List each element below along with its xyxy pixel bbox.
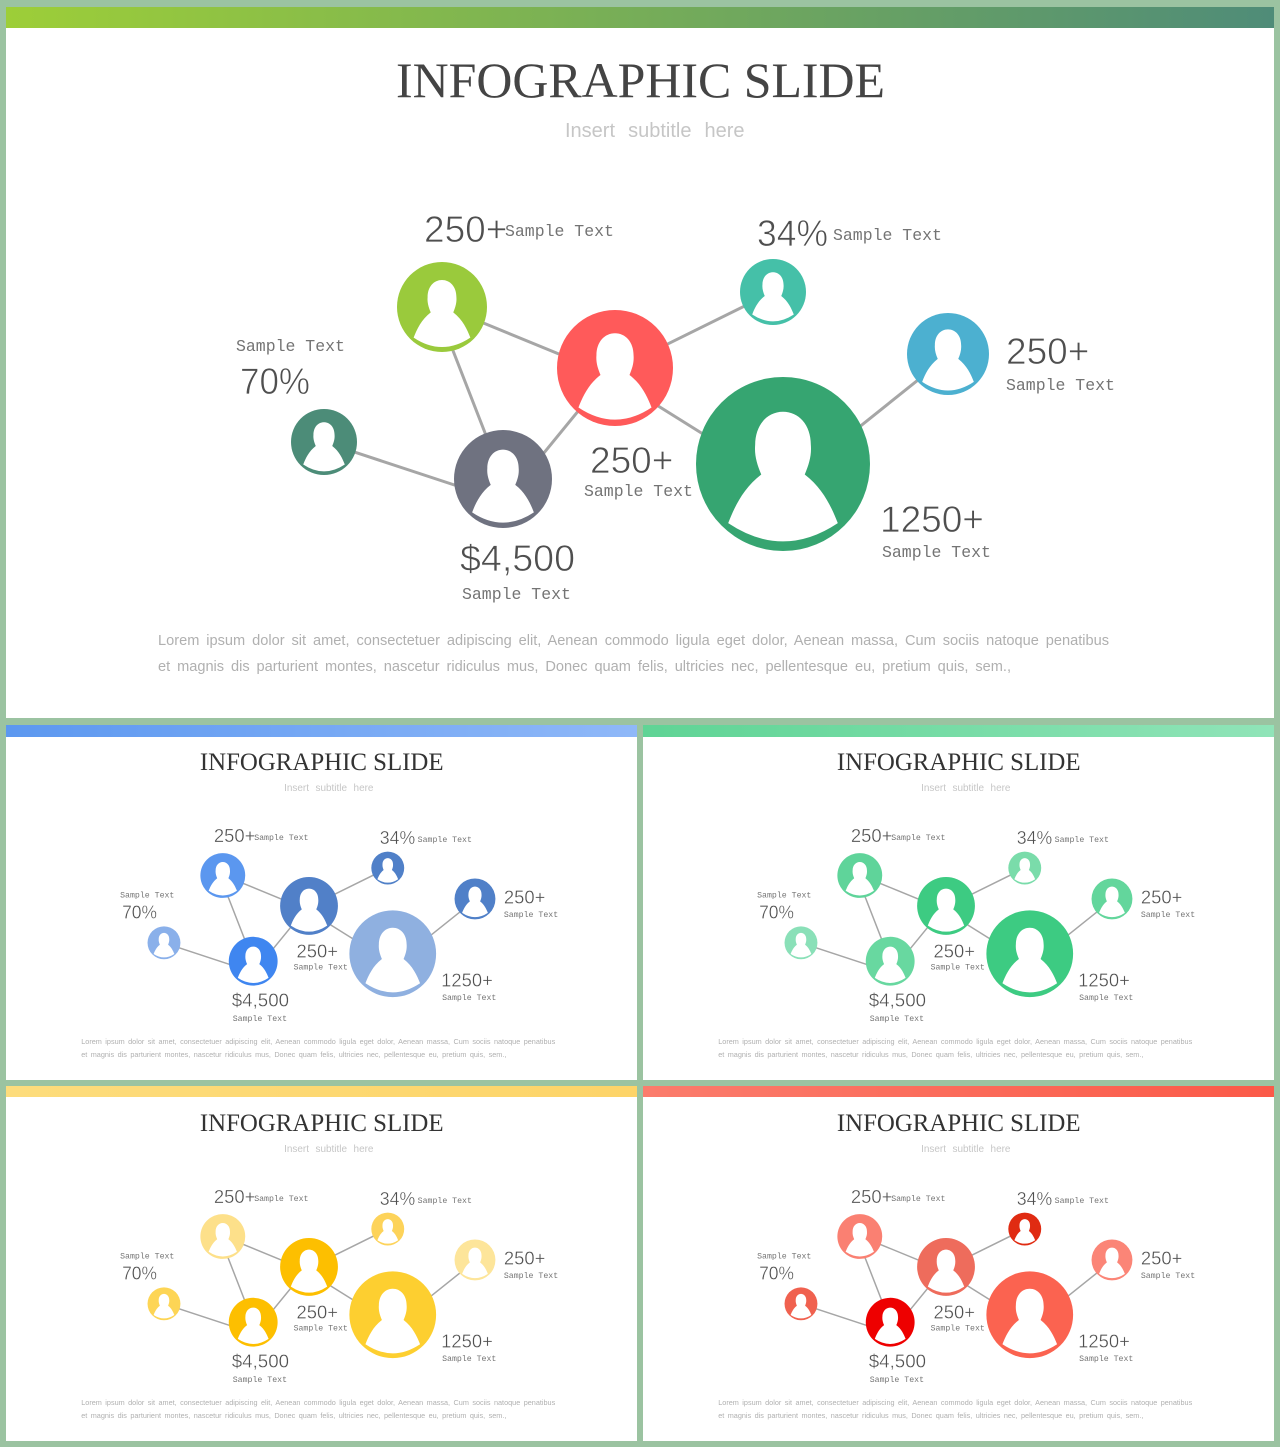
node: person [200, 853, 245, 898]
stat: 250+ center [931, 941, 985, 973]
stat: 250+ center: 250+ [590, 440, 673, 481]
stat: 1250+: 1250+ [880, 499, 984, 540]
node: large person [349, 910, 436, 997]
red slide content [718, 1110, 1195, 1420]
network connecting lines [164, 1229, 475, 1334]
stat: 34%: Sample Text [418, 835, 472, 845]
stat: 70%: Sample Text [120, 890, 174, 900]
body text: et magnis dis parturient montes, nascetur ridiculus mus, Donec quam felis, ultricies nec, pellentesque eu, pretium quis, sem., [718, 1050, 1143, 1059]
stat: 1250+ [441, 1331, 496, 1364]
stat: 1250+ [880, 499, 991, 562]
node: person [455, 878, 495, 919]
node: person [1008, 852, 1041, 884]
stat: 1250+: 1250+ [1078, 1331, 1130, 1352]
stat: 70%: Sample Text [757, 1251, 811, 1261]
stat: 1250+: Sample Text [882, 543, 991, 562]
stat: 34% [1017, 1188, 1109, 1209]
stat: 70% [120, 890, 174, 922]
stat: 250+ upper left: 250+ [851, 825, 892, 846]
node: person [148, 926, 180, 959]
title: INFOGRAPHIC SLIDE [200, 749, 444, 776]
body text [718, 1037, 1193, 1059]
stat: 250+ right: Sample Text [504, 910, 558, 920]
body text: Lorem ipsum dolor sit amet, consectetuer adipiscing elit, Aenean commodo ligula eget dolor, Aenean massa, Cum sociis natoque penatibus [718, 1037, 1193, 1046]
node: lime person [397, 262, 487, 352]
title: INFOGRAPHIC SLIDE [396, 52, 885, 108]
stat: $4,500 [869, 1351, 926, 1385]
stat: 250+ right: Sample Text [1141, 1271, 1195, 1281]
stat: 250+ center: 250+ [934, 941, 975, 962]
blue top bar [6, 725, 637, 737]
stat: 34%: Sample Text [1055, 1196, 1109, 1206]
stat: $4,500 [460, 538, 575, 604]
stat: $4,500 [232, 1351, 289, 1385]
stat: 250+ upper left: Sample Text [891, 1194, 946, 1204]
stat: 34%: 34% [1017, 827, 1052, 848]
stat: 34%: 34% [380, 827, 415, 848]
stat: $4,500: $4,500 [460, 538, 575, 579]
stat: 250+ center: Sample Text [931, 963, 985, 973]
stat: 250+ center: 250+ [297, 941, 338, 962]
panel: main slide [6, 7, 1274, 718]
network connecting lines [164, 868, 475, 973]
node: teal person [740, 259, 806, 325]
node: person [371, 852, 404, 884]
node: person [785, 1287, 817, 1320]
stat: 34%: 34% [1017, 1188, 1052, 1209]
body text: et magnis dis parturient montes, nascetur ridiculus mus, Donec quam felis, ultricies nec, pellentesque eu, pretium quis, sem., [81, 1050, 506, 1059]
stat: 34% [757, 213, 942, 254]
node: grey person [454, 430, 552, 528]
stat: 250+ center [294, 1302, 348, 1334]
title: INFOGRAPHIC SLIDE [837, 1110, 1081, 1137]
stat: $4,500: $4,500 [869, 1351, 926, 1372]
stat: 70% [757, 1251, 811, 1283]
stat: 250+ center: Sample Text [931, 1324, 985, 1334]
body text [81, 1037, 556, 1059]
node: person [229, 937, 278, 986]
stat: $4,500: Sample Text [233, 1014, 287, 1024]
body text [718, 1398, 1193, 1420]
stat: 70% [757, 890, 811, 922]
body text: Lorem ipsum dolor sit amet, consectetuer adipiscing elit, Aenean commodo ligula eget dolor, Aenean massa, Cum sociis natoque penatibus [81, 1037, 556, 1046]
stat: 70% [120, 1251, 174, 1283]
node: person [837, 853, 882, 898]
stat: 250+ upper left: 250+ [214, 825, 255, 846]
stat: 250+ upper left: Sample Text [254, 1194, 309, 1204]
node: person [866, 937, 915, 986]
stat: $4,500 [869, 990, 926, 1024]
body text: Lorem ipsum dolor sit amet, consectetuer adipiscing elit, Aenean commodo ligula eget dolor, Aenean massa, Cum sociis natoque penatibus [81, 1398, 556, 1407]
panel: yellow slide [6, 1086, 637, 1441]
node: person [1008, 1213, 1041, 1245]
stat: 70%: 70% [122, 901, 157, 922]
stat: 250+ upper left: 250+ [214, 1186, 255, 1207]
panel: green slide [643, 725, 1274, 1080]
node: person [371, 1213, 404, 1245]
node: person [785, 926, 817, 959]
node: large person [986, 910, 1073, 997]
stat: 250+ center: Sample Text [294, 1324, 348, 1334]
node: dark teal person [291, 409, 357, 475]
node: red person [557, 310, 673, 426]
stat: 250+ right [504, 886, 558, 920]
stat: 250+ center: 250+ [934, 1302, 975, 1323]
stat: $4,500: $4,500 [232, 1351, 289, 1372]
body text: et magnis dis parturient montes, nascetur ridiculus mus, Donec quam felis, ultricies nec, pellentesque eu, pretium quis, sem., [158, 659, 1011, 675]
blue slide content [81, 749, 558, 1059]
stat: 34% [380, 1188, 472, 1209]
stat: $4,500: $4,500 [869, 990, 926, 1011]
panel: blue slide [6, 725, 637, 1080]
stat: $4,500: Sample Text [462, 585, 571, 604]
network connecting lines [324, 292, 948, 503]
node: person [917, 1238, 975, 1296]
stat: 34%: Sample Text [1055, 835, 1109, 845]
stat: 34% [1017, 827, 1109, 848]
stat: 1250+ [441, 970, 496, 1003]
stat: $4,500 [232, 990, 289, 1024]
stat: 1250+: Sample Text [1079, 1354, 1133, 1364]
stat: 250+ right: Sample Text [1141, 910, 1195, 920]
stat: 250+ right: 250+ [504, 1247, 545, 1268]
stat: 250+ right: 250+ [504, 886, 545, 907]
node: person [866, 1298, 915, 1347]
stat: $4,500: Sample Text [870, 1375, 924, 1385]
stat: 34%: Sample Text [833, 226, 942, 245]
stat: 70%: Sample Text [757, 890, 811, 900]
stat: 250+ upper left [214, 825, 309, 846]
stat: $4,500: Sample Text [870, 1014, 924, 1024]
stat: 34%: Sample Text [418, 1196, 472, 1206]
stat: 1250+ [1078, 1331, 1133, 1364]
green slide content [718, 749, 1195, 1059]
subtitle: Insert subtitle here [284, 1144, 374, 1155]
stat: 250+ center [584, 440, 693, 501]
top gradient bar [6, 7, 1274, 28]
stat: 1250+ [1078, 970, 1133, 1003]
green top bar [643, 725, 1274, 737]
body text: Lorem ipsum dolor sit amet, consectetuer adipiscing elit, Aenean commodo ligula eget dolor, Aenean massa, Cum sociis natoque penatibus [158, 633, 1109, 649]
stat: 250+ upper left: Sample Text [505, 222, 614, 241]
stat: 250+ upper left [424, 209, 614, 250]
title: INFOGRAPHIC SLIDE [837, 749, 1081, 776]
subtitle: Insert subtitle here [921, 783, 1011, 794]
node: person [229, 1298, 278, 1347]
stat: 250+ right [1006, 331, 1115, 395]
panel: red slide [643, 1086, 1274, 1441]
node: large person [986, 1271, 1073, 1358]
stat: 1250+: 1250+ [441, 1331, 493, 1352]
stat: 250+ center: 250+ [297, 1302, 338, 1323]
subtitle: Insert subtitle here [565, 120, 745, 142]
stat: 34%: 34% [757, 213, 828, 254]
stat: 1250+: Sample Text [1079, 993, 1133, 1003]
stat: 250+ upper left: Sample Text [254, 833, 309, 843]
red top bar [643, 1086, 1274, 1097]
stat: 70%: 70% [759, 1262, 794, 1283]
stat: 250+ right: Sample Text [504, 1271, 558, 1281]
stat: 250+ center [294, 941, 348, 973]
stat: 250+ upper left [214, 1186, 309, 1207]
body text: Lorem ipsum dolor sit amet, consectetuer adipiscing elit, Aenean commodo ligula eget dolor, Aenean massa, Cum sociis natoque penatibus [718, 1398, 1193, 1407]
yellow slide content [81, 1110, 558, 1420]
node: person [455, 1239, 495, 1280]
node: person [200, 1214, 245, 1259]
stat: 70%: 70% [240, 361, 310, 402]
stat: 250+ upper left: 250+ [851, 1186, 892, 1207]
stat: 250+ right [1141, 886, 1195, 920]
stat: 250+ right: 250+ [1006, 331, 1089, 372]
subtitle: Insert subtitle here [284, 783, 374, 794]
stat: 250+ upper left [851, 825, 946, 846]
stat: 70%: Sample Text [236, 337, 345, 356]
stat: 70%: 70% [759, 901, 794, 922]
stat: $4,500: Sample Text [233, 1375, 287, 1385]
stat: 250+ right: 250+ [1141, 1247, 1182, 1268]
node: person [1092, 878, 1132, 919]
stat: 1250+: 1250+ [441, 970, 493, 991]
stat: 1250+: 1250+ [1078, 970, 1130, 991]
stat: 250+ upper left: 250+ [424, 209, 507, 250]
yellow top bar [6, 1086, 637, 1097]
node: person [837, 1214, 882, 1259]
stat: 250+ center: Sample Text [294, 963, 348, 973]
node: large green person [696, 377, 870, 551]
stat: 34% [380, 827, 472, 848]
stat: 250+ right [504, 1247, 558, 1281]
node: person [148, 1287, 180, 1320]
stat: 250+ upper left: Sample Text [891, 833, 946, 843]
body text: et magnis dis parturient montes, nascetur ridiculus mus, Donec quam felis, ultricies nec, pellentesque eu, pretium quis, sem., [718, 1411, 1143, 1420]
stat: 1250+: Sample Text [442, 993, 496, 1003]
stat: $4,500: $4,500 [232, 990, 289, 1011]
title: INFOGRAPHIC SLIDE [200, 1110, 444, 1137]
stat: 250+ upper left [851, 1186, 946, 1207]
stat: 250+ center: Sample Text [584, 482, 693, 501]
stat: 250+ right: Sample Text [1006, 376, 1115, 395]
network connecting lines [801, 1229, 1112, 1334]
node: blue person [907, 313, 989, 395]
subtitle: Insert subtitle here [921, 1144, 1011, 1155]
node: person [1092, 1239, 1132, 1280]
body text [158, 633, 1109, 675]
body text: et magnis dis parturient montes, nascetur ridiculus mus, Donec quam felis, ultricies nec, pellentesque eu, pretium quis, sem., [81, 1411, 506, 1420]
network connecting lines [801, 868, 1112, 973]
stat: 34%: 34% [380, 1188, 415, 1209]
node: person [917, 877, 975, 935]
node: person [280, 1238, 338, 1296]
stat: 1250+: Sample Text [442, 1354, 496, 1364]
node: person [280, 877, 338, 935]
stat: 250+ center [931, 1302, 985, 1334]
body text [81, 1398, 556, 1420]
stat: 250+ right [1141, 1247, 1195, 1281]
stat: 70%: 70% [122, 1262, 157, 1283]
stat: 70%: Sample Text [120, 1251, 174, 1261]
stat: 70% [236, 337, 345, 402]
node: large person [349, 1271, 436, 1358]
stat: 250+ right: 250+ [1141, 886, 1182, 907]
